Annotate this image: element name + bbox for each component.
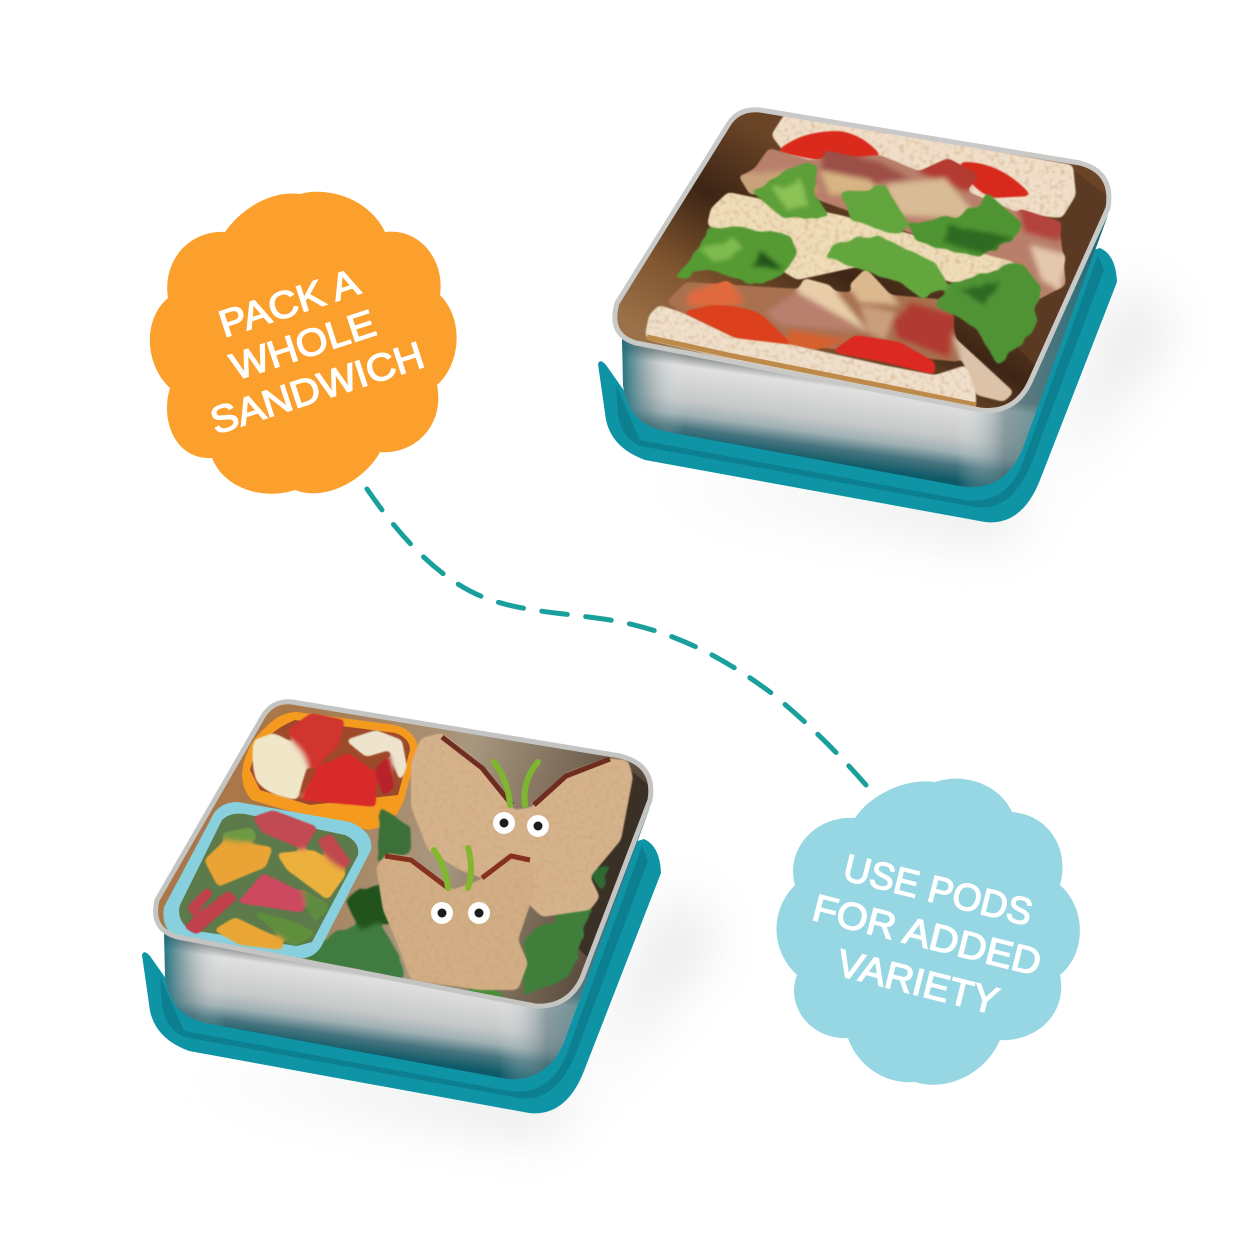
front eyes: [431, 902, 490, 924]
back tomato: [776, 131, 1032, 198]
back meats: [740, 148, 1066, 300]
orange pod: [242, 712, 418, 830]
steel rim: [156, 702, 651, 1006]
bread crust: [647, 337, 976, 405]
teal lid: [598, 248, 1117, 522]
top box shadow: [650, 280, 1170, 540]
badge text: [808, 847, 1045, 1023]
rear antennae: [494, 762, 538, 805]
blue pod: [163, 802, 371, 958]
badge text: USE PODS: [839, 847, 1036, 935]
orange scalloped badge: [150, 192, 457, 494]
badge text: [205, 261, 429, 443]
bottom box shadow: [195, 890, 715, 1135]
badge text: VARIETY: [833, 943, 1003, 1023]
rear eyes: [493, 812, 549, 837]
front butterfly sandwich: [376, 853, 535, 990]
steel outer wall: [164, 807, 650, 1079]
middle bread: [707, 192, 1014, 283]
badge: use pods: [776, 779, 1080, 1085]
badge text: WHOLE: [225, 303, 381, 389]
teal lid: [142, 839, 661, 1113]
front antennae: [434, 848, 471, 888]
front tomato: [681, 305, 935, 375]
steel rim: [615, 110, 1109, 410]
blue pod inner: [179, 814, 358, 946]
steel outer wall: [622, 215, 1108, 487]
back bread: [771, 112, 1076, 218]
dashed connector: [367, 489, 866, 785]
lettuce leaves lower: [673, 227, 1042, 365]
lunch box: pods: [142, 702, 661, 1113]
box interior and sandwich: [615, 110, 1112, 410]
rear butterfly sandwich: [411, 733, 633, 917]
front meats: [666, 268, 1014, 402]
badge text: SANDWICH: [205, 335, 429, 443]
front jam line: [385, 856, 530, 888]
lid inner step: [616, 255, 1104, 507]
badge text: FOR ADDED: [808, 887, 1045, 985]
rear jam line: [442, 737, 610, 805]
badge: pack a whole sandwich: [150, 192, 457, 494]
box interior and food: [156, 702, 655, 1006]
lettuce leaves upper: [752, 165, 1021, 258]
front bread: [645, 305, 976, 410]
blue scalloped badge: [776, 779, 1080, 1085]
fruit: [252, 713, 407, 807]
greens: [300, 807, 612, 1002]
badge text: PACK A: [214, 261, 365, 346]
lunch box: whole sandwich: [598, 110, 1117, 522]
infographic canvas: [142, 107, 1166, 1140]
lid inner step: [160, 846, 648, 1098]
fish crackers: [183, 810, 352, 950]
